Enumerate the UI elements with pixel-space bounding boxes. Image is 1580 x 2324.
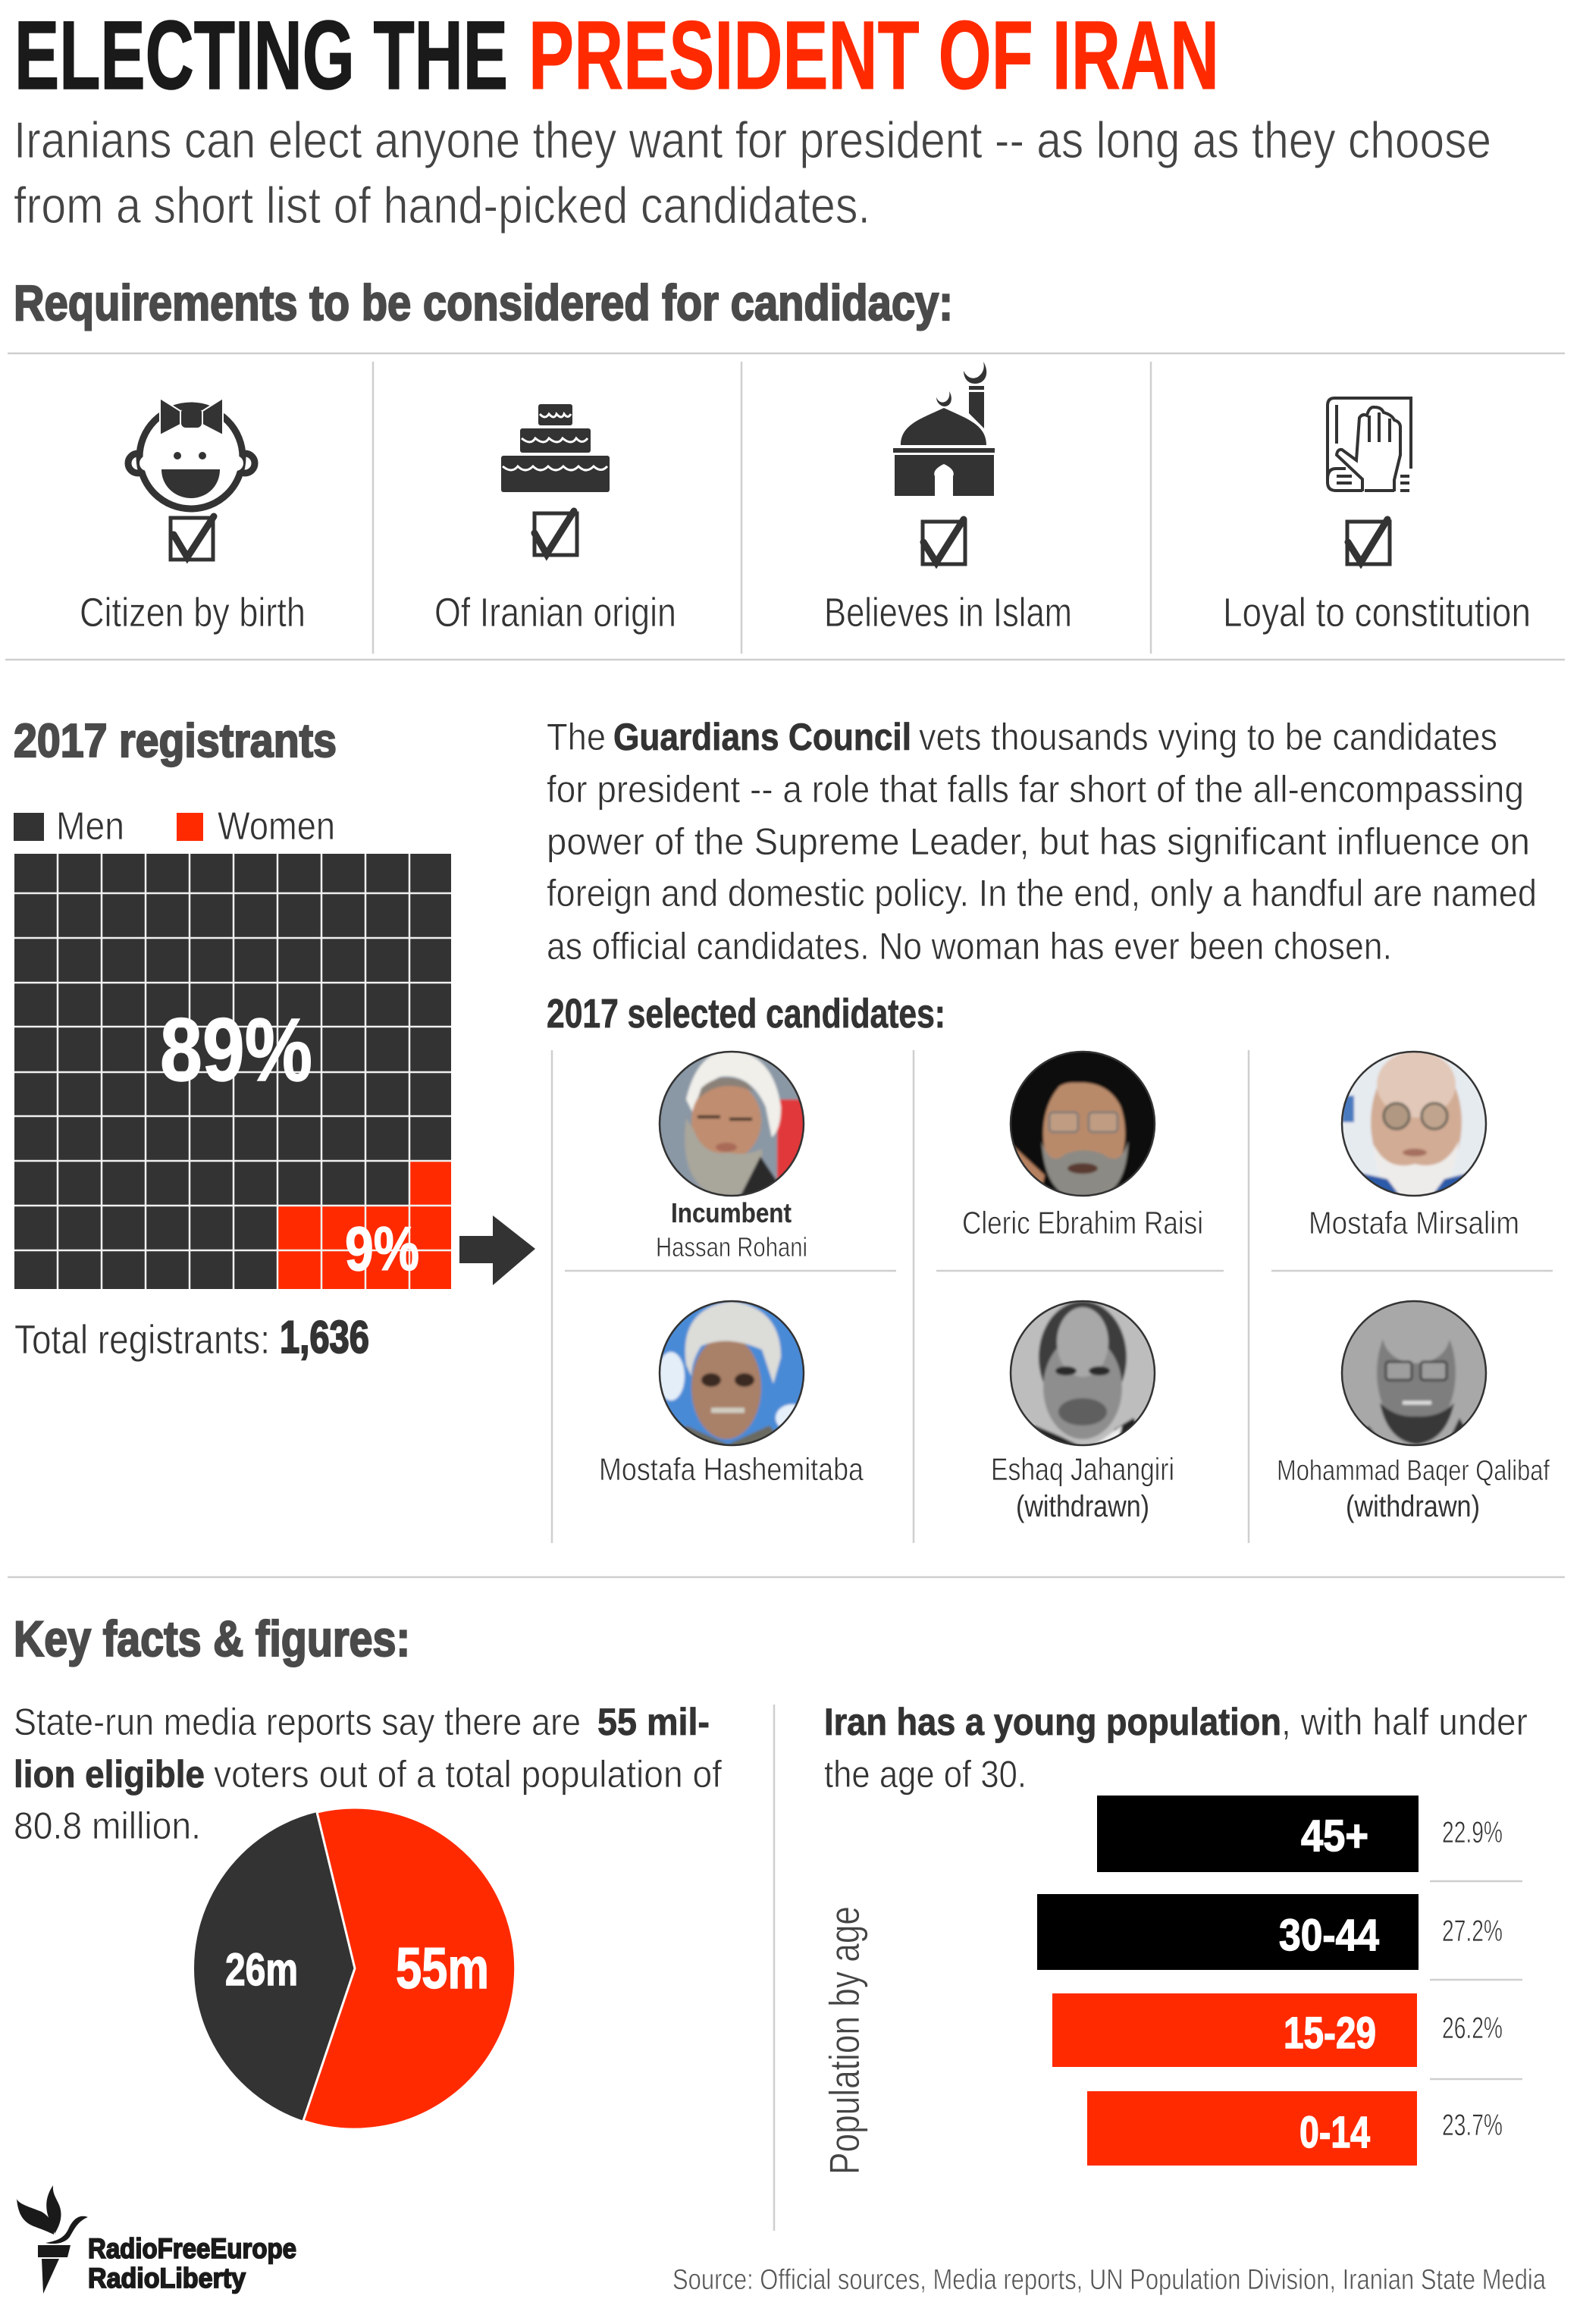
label: Eshaq Jahangiri withdrawn: (withdrawn) xyxy=(1016,1490,1149,1523)
text block: eligible voters: lion eligible xyxy=(14,1753,205,1796)
text block: young population: the age of 30. xyxy=(824,1753,1027,1796)
axis label: population by age: Population by age xyxy=(820,1906,868,2175)
icon: baby with bow xyxy=(128,398,255,509)
bar: 30-44 xyxy=(1037,1894,1503,1970)
bar: 30-44: 30-44 xyxy=(1279,1911,1379,1960)
heading: 2017 registrants: 2017 registrants xyxy=(14,715,337,767)
icon: checkbox constitution xyxy=(1347,519,1390,564)
label: Eshaq Jahangiri withdrawn xyxy=(991,1451,1174,1523)
total registrants: Total registrants: xyxy=(14,1317,270,1363)
bar: 45+: 45+ xyxy=(1301,1811,1368,1861)
icon: checkbox origin xyxy=(535,511,577,555)
label: Mohammad Baqer Qalibaf withdrawn xyxy=(1277,1455,1550,1523)
logo: RadioFreeEurope RadioLiberty xyxy=(17,2185,296,2294)
bar: 15-29: 26.2% xyxy=(1442,2012,1503,2045)
text block: Guardians Council: power of the Supreme Leader, but has significant influence on xyxy=(547,820,1530,863)
chart: waffle of registrants by gender xyxy=(14,854,451,1289)
label: incumbent Hassan Rohani: Hassan Rohani xyxy=(656,1231,807,1262)
icon: cake xyxy=(501,404,610,492)
title: ELECTING THE xyxy=(14,2,508,110)
label: 26m: 26m xyxy=(225,1944,298,1995)
icon: checkbox citizen xyxy=(171,516,214,560)
portrait: Ebrahim Raisi xyxy=(1007,1048,1158,1200)
text block: Guardians Council: Guardians Council xyxy=(613,716,911,758)
wordmark: RadioLiberty xyxy=(88,2263,246,2294)
portrait: Hassan Rohani xyxy=(656,1048,807,1200)
panel: candidates xyxy=(599,1048,1550,1523)
subtitle xyxy=(14,111,1491,234)
chart: pie of eligible voters xyxy=(194,1808,516,2129)
label: believes in Islam: Believes in Islam xyxy=(824,590,1072,635)
heading: requirements: Requirements to be considered for candidacy: xyxy=(14,274,953,331)
text block: young population xyxy=(824,1701,1528,1796)
label: loyal to constitution: Loyal to constitution xyxy=(1223,590,1531,635)
heading: 2017 selected candidates: 2017 selected candidates: xyxy=(547,991,945,1037)
text block: Guardians Council: as official candidates. No woman has ever been chosen. xyxy=(547,925,1392,968)
portrait: Eshaq Jahangiri xyxy=(1007,1297,1158,1450)
label: 89 percent: 89% xyxy=(160,1000,312,1100)
text block: young population: Iran has a young population xyxy=(824,1701,1281,1743)
label: incumbent Hassan Rohani xyxy=(656,1197,807,1262)
text block: eligible voters: voters out of a total population of xyxy=(214,1753,722,1796)
panel: requirements row xyxy=(80,362,1531,635)
subtitle: from a short list of hand-picked candidates. xyxy=(14,177,870,234)
bar: 15-29 xyxy=(1052,1993,1503,2067)
bar: 15-29: 15-29 xyxy=(1284,2009,1376,2058)
label: of Iranian origin: Of Iranian origin xyxy=(434,590,676,635)
text block: eligible voters: 80.8 million. xyxy=(14,1805,201,1847)
label: Eshaq Jahangiri withdrawn: Eshaq Jahangiri xyxy=(991,1451,1174,1487)
text block: Guardians Council: The xyxy=(547,716,606,758)
chart: population by age xyxy=(1037,1796,1522,2166)
portrait: Mostafa Mirsalim xyxy=(1338,1048,1490,1200)
title: PRESIDENT OF IRAN xyxy=(528,2,1219,110)
title xyxy=(14,2,1219,110)
label: Mostafa Hashemitaba: Mostafa Hashemitaba xyxy=(599,1451,864,1487)
text block: eligible voters xyxy=(14,1701,722,1847)
bar: 0-14: 23.7% xyxy=(1442,2109,1503,2142)
text block: eligible voters: State-run media reports say there are xyxy=(14,1701,581,1743)
icon: mosque xyxy=(893,362,995,496)
bar: 30-44: 27.2% xyxy=(1442,1915,1503,1948)
label: incumbent Hassan Rohani: Incumbent xyxy=(671,1197,792,1228)
portrait: Mostafa Hashemitaba xyxy=(656,1297,809,1450)
wordmark xyxy=(88,2233,296,2294)
text block: young population: , with half under xyxy=(1281,1701,1528,1743)
portrait: Mohammad Baqer Qalibaf xyxy=(1338,1297,1490,1450)
text block: Guardians Council: vets thousands vying to be candidates xyxy=(919,716,1497,758)
text block: Guardians Council: for president -- a role that falls far short of the all-encompassing xyxy=(547,768,1524,811)
legend: Women xyxy=(218,804,335,848)
label: 55m: 55m xyxy=(396,1937,489,2001)
icon: checkbox islam xyxy=(923,519,965,564)
wordmark: RadioFreeEurope xyxy=(88,2233,296,2264)
bar: 45+ xyxy=(1097,1796,1503,1872)
label: Mohammad Baqer Qalibaf withdrawn: (withdrawn) xyxy=(1346,1490,1480,1523)
bar: 0-14: 0-14 xyxy=(1299,2108,1370,2157)
total registrants: 1,636 xyxy=(280,1312,369,1363)
label: citizen by birth: Citizen by birth xyxy=(80,590,306,635)
bar: 45+: 22.9% xyxy=(1442,1816,1503,1849)
arrow xyxy=(459,1215,535,1285)
label: Mostafa Mirsalim: Mostafa Mirsalim xyxy=(1309,1205,1519,1240)
bar: 0-14 xyxy=(1087,2091,1503,2166)
legend xyxy=(14,804,335,848)
text block: Guardians Council xyxy=(547,716,1537,968)
label: Ebrahim Raisi: Cleric Ebrahim Raisi xyxy=(962,1205,1203,1240)
legend: Men xyxy=(56,804,124,848)
label: 9 percent: 9% xyxy=(345,1215,419,1284)
text block: eligible voters: 55 mil- xyxy=(597,1701,710,1743)
heading: key facts: Key facts & figures: xyxy=(14,1610,410,1667)
icon: torch xyxy=(17,2185,88,2294)
icon: hand on book xyxy=(1328,398,1411,491)
